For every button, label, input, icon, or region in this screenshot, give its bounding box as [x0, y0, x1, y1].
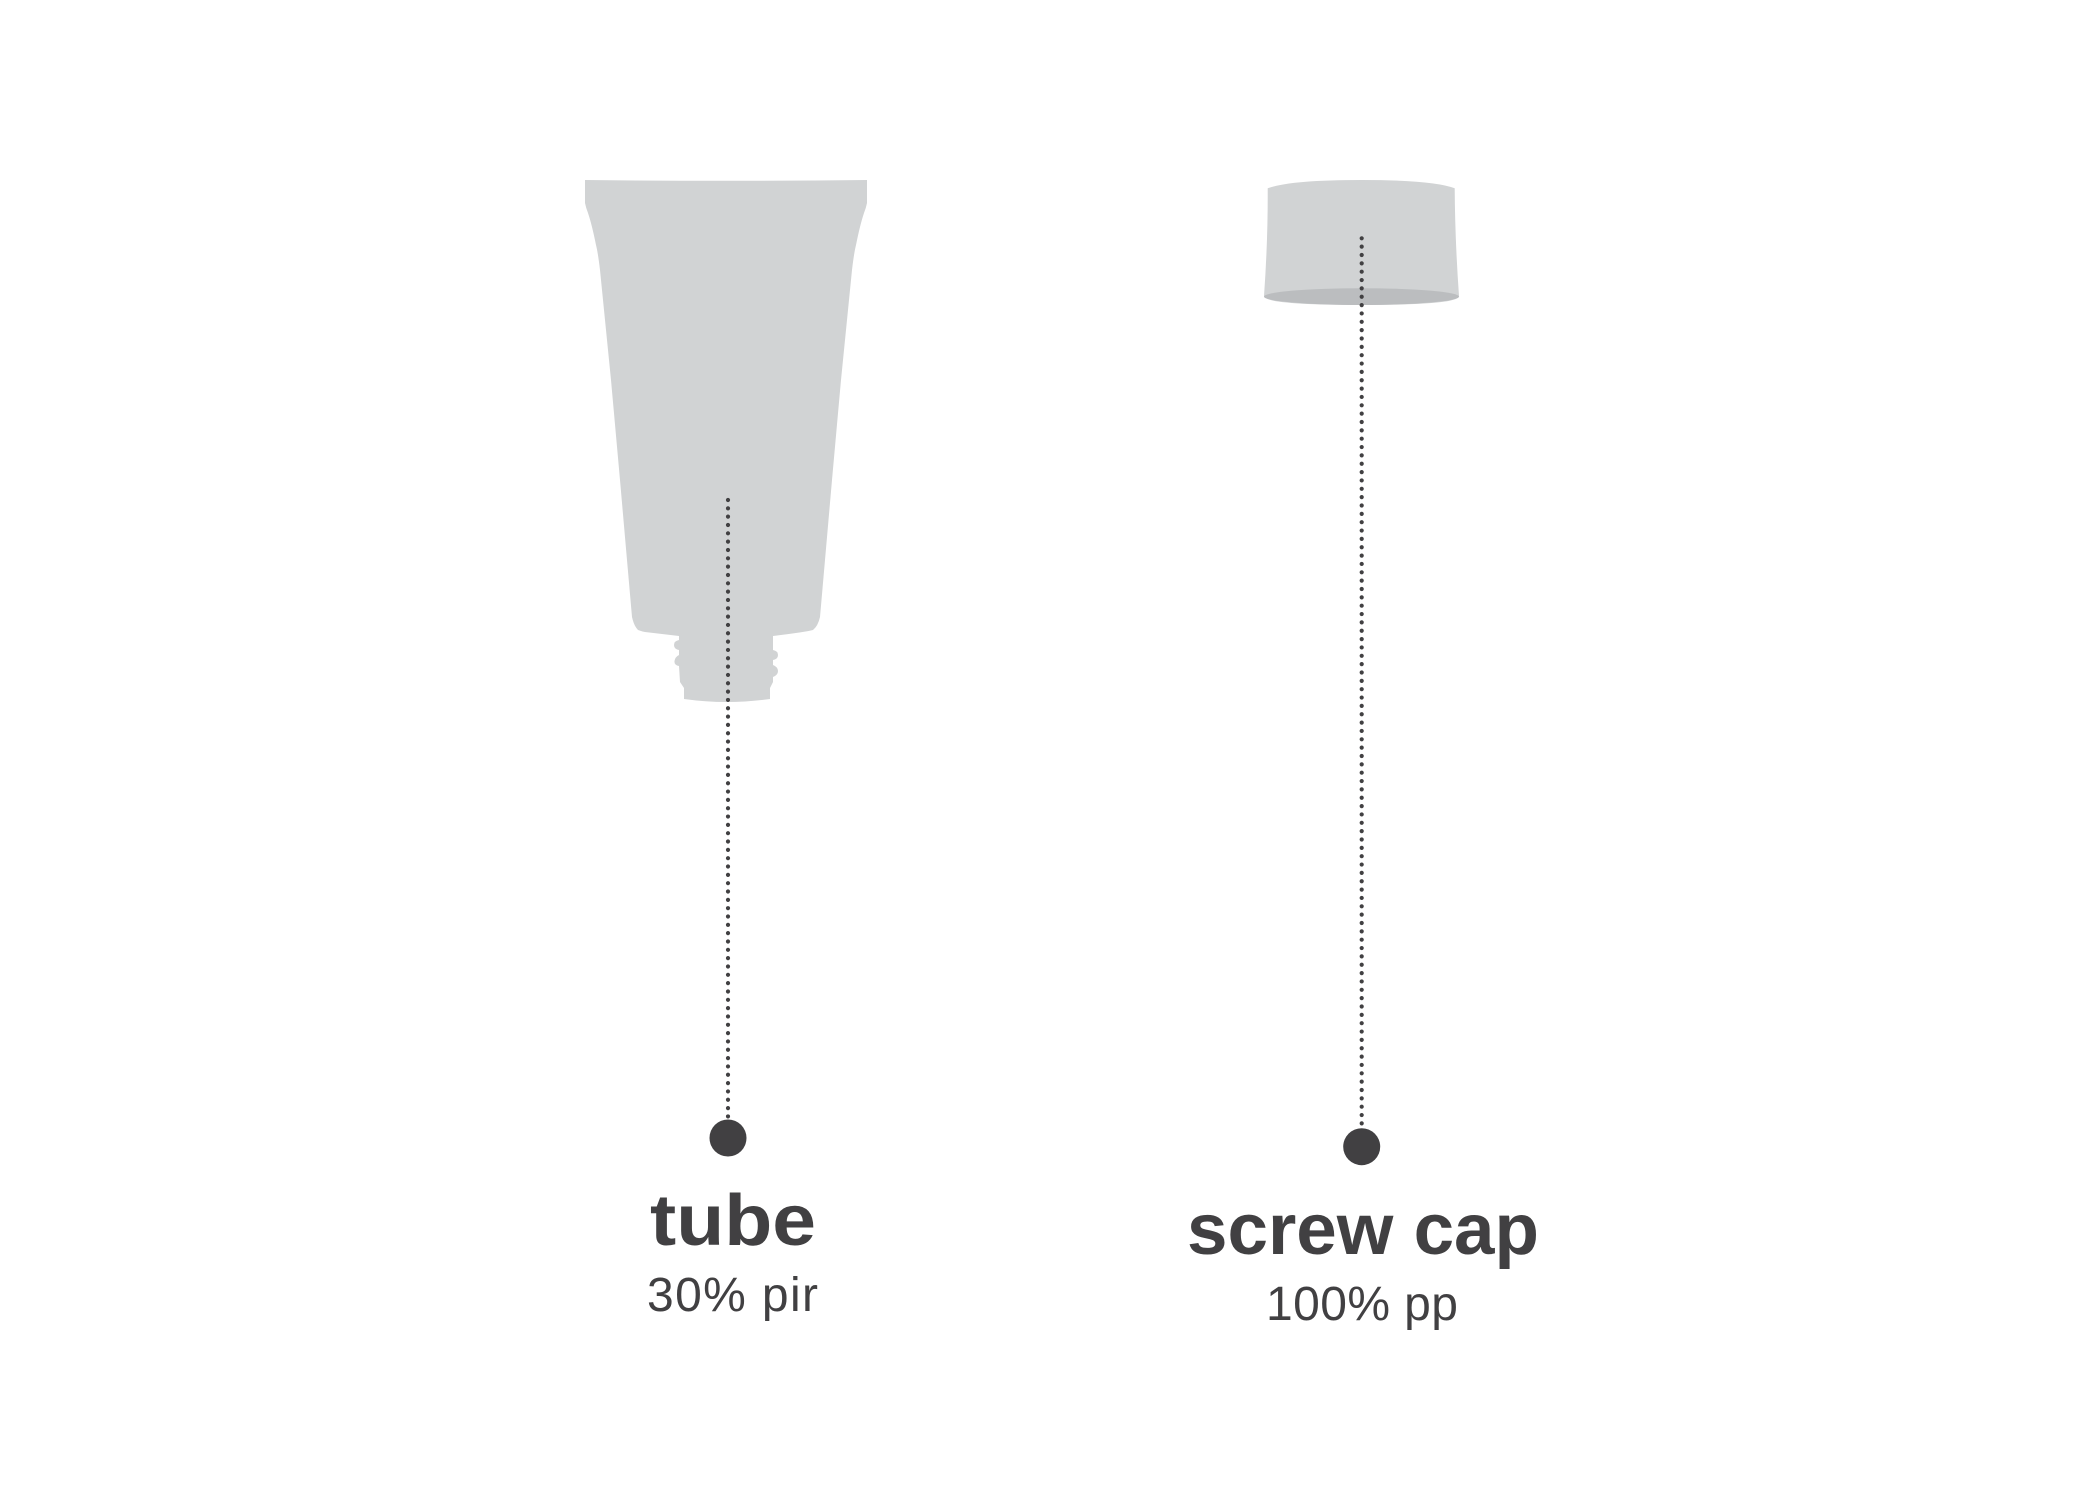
panel: tube component — [585, 180, 867, 1322]
material: 30% pir: 30% pir — [647, 1269, 818, 1322]
dotted leader line: tube — [726, 500, 730, 1117]
panel: screw cap component — [1187, 180, 1539, 1331]
marker dot: screw cap — [1343, 1128, 1380, 1165]
material: 100% pp: 100% pp — [1266, 1278, 1458, 1331]
icon: tube silhouette — [585, 180, 867, 702]
label: screw cap: screw cap — [1187, 1190, 1539, 1270]
label: tube: tube — [650, 1181, 816, 1261]
icon: screw cap silhouette — [1264, 180, 1459, 305]
marker dot: tube — [710, 1120, 746, 1156]
dotted leader line: screw cap — [1360, 238, 1364, 1125]
